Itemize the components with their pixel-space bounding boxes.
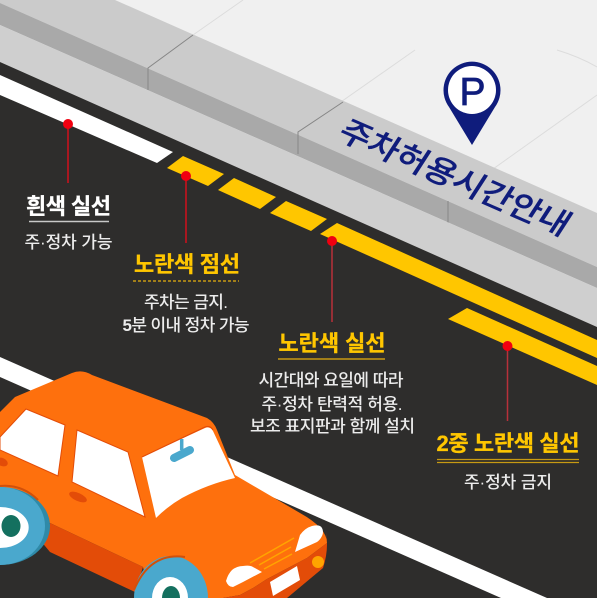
label: yellow solid line: 보조 표지판과 함께 설치	[250, 417, 415, 436]
door handles	[0, 456, 88, 505]
label: yellow dashed line: 노란색 점선	[134, 252, 240, 277]
middle side window	[72, 430, 145, 517]
label: yellow solid line: 주·정차 탄력적 허용.	[262, 395, 402, 414]
yellow solid line	[320, 223, 597, 358]
indicator light	[312, 556, 324, 568]
rear side window	[0, 409, 65, 476]
white solid line	[0, 75, 173, 163]
label: yellow solid line: 시간대와 요일에 따라	[258, 371, 404, 390]
double yellow line lower strip	[448, 308, 597, 385]
label: double yellow line: 2중 노란색 실선	[436, 431, 580, 456]
label: white solid line: 흰색 실선	[26, 194, 111, 219]
yellow dashed line	[167, 156, 327, 231]
car body	[0, 371, 327, 598]
label: yellow dashed line	[122, 252, 250, 335]
label: double yellow line	[436, 431, 580, 492]
grille lines	[250, 538, 294, 569]
label: yellow solid line	[250, 331, 415, 436]
lower white lane line	[0, 357, 547, 598]
parking pin icon	[444, 62, 500, 145]
label: white solid line	[24, 194, 112, 252]
gutter	[0, 25, 597, 327]
rear-view mirror	[174, 439, 190, 458]
headlights	[226, 525, 323, 587]
windshield top trim	[142, 426, 213, 457]
windshield	[142, 427, 235, 518]
pointer: yellow dashed line	[181, 171, 191, 243]
pointer: yellow solid line	[327, 236, 337, 322]
license plate	[270, 566, 300, 596]
label: double yellow line: 주·정차 금지	[464, 473, 552, 492]
label: white solid line: 주·정차 가능	[24, 233, 112, 252]
curb	[0, 0, 597, 288]
curb title text: 주차허용시간안내	[332, 114, 577, 242]
front wheel	[134, 556, 208, 598]
label: yellow solid line: 노란색 실선	[278, 331, 386, 356]
parking pin icon: P	[459, 71, 486, 114]
rear wheel	[0, 486, 50, 565]
label: yellow dashed line: 주차는 금지.	[144, 293, 228, 312]
pointer: double yellow line	[502, 341, 512, 421]
car skirt	[40, 523, 143, 592]
pointer: white solid line	[63, 119, 73, 183]
car	[0, 371, 327, 598]
label: yellow dashed line: 5분 이내 정차 가능	[122, 316, 250, 335]
car front face	[223, 532, 327, 598]
